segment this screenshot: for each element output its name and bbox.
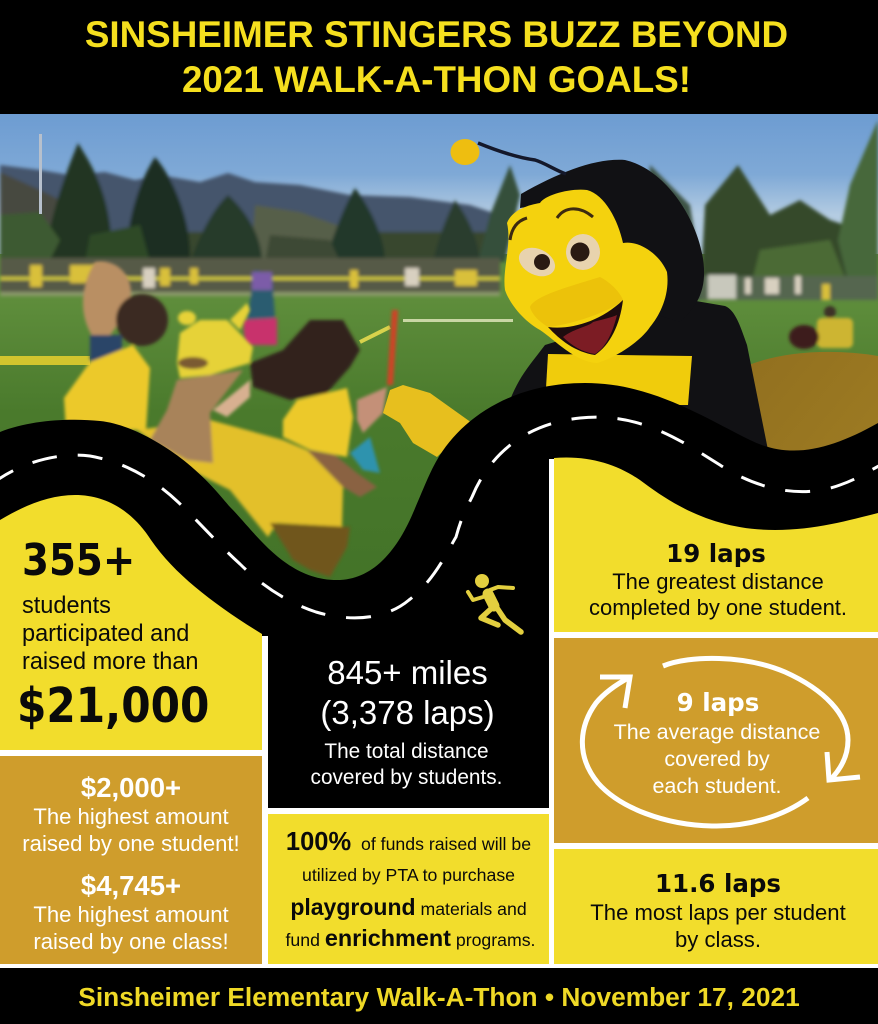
stat: 355+ students: [17, 535, 209, 734]
miles caption: covered by students.: [311, 766, 502, 789]
caption: The greatest distance: [612, 569, 824, 594]
mouth: [548, 300, 623, 355]
stat: 19 laps: [589, 539, 847, 620]
caption: [589, 569, 847, 620]
title banner: [0, 0, 878, 114]
panel: funds yellow: [268, 814, 549, 964]
child: girl with cap: [137, 420, 343, 537]
miles caption: The total distance: [324, 740, 489, 763]
title: SINSHEIMER STINGERS BUZZ BEYOND: [85, 14, 788, 55]
number 355+: 355+: [22, 535, 135, 586]
panel: money gold: [0, 756, 262, 964]
hood: [520, 160, 704, 322]
arm: [307, 450, 377, 497]
eyes: [514, 242, 560, 282]
stat: total miles: [311, 654, 502, 789]
highest by class: raised by one class!: [33, 929, 229, 954]
caption: completed by one student.: [589, 595, 847, 620]
photo: walk-a-thon field with mascot: [0, 114, 878, 594]
students text: participated and: [22, 620, 189, 647]
hand: [357, 387, 387, 433]
miles heading: [320, 654, 495, 731]
miles caption: [311, 740, 502, 789]
panel: average gold: [554, 638, 878, 843]
panel: most laps yellow: [554, 849, 878, 964]
highest by student: The highest amount: [33, 804, 229, 829]
line two: utilized by PTA to purchase: [302, 865, 515, 885]
child: long-haired runner: [83, 262, 131, 341]
icon: runner: [468, 574, 521, 632]
road centre dashes: [0, 417, 878, 618]
sleeve: [383, 385, 472, 457]
child: girl with dark hair: [283, 388, 353, 457]
caption: each student.: [652, 774, 782, 798]
blue cup: [350, 437, 380, 473]
wing: [746, 352, 878, 470]
caption: The average distance: [614, 720, 820, 744]
brows: [510, 218, 527, 240]
highest by student: [22, 772, 240, 856]
footer bar: [0, 968, 878, 1024]
line three: playground materials and: [290, 894, 527, 920]
caption: by class.: [675, 927, 761, 952]
stat: 9 laps: [614, 688, 820, 798]
highest by student: $2,000+: [81, 772, 181, 803]
miles heading: 845+ miles: [327, 654, 488, 691]
caption: [614, 720, 820, 798]
amount raised: $21,000: [17, 678, 209, 734]
students text: [22, 592, 198, 675]
title: [85, 14, 788, 100]
miles heading: (3,378 laps): [320, 694, 495, 731]
people at right: [789, 306, 853, 349]
highest by class: [33, 870, 229, 954]
title: 2021 WALK-A-THON GOALS!: [182, 59, 691, 100]
students text: raised more than: [22, 648, 198, 675]
tape lines: [0, 356, 90, 365]
stat: 11.6 laps: [590, 869, 846, 952]
footer: Sinsheimer Elementary Walk-A-Thon • November 17, 2021: [78, 982, 800, 1012]
highest by class: $4,745+: [81, 870, 181, 901]
body: [510, 300, 770, 460]
line four: fund enrichment programs.: [286, 925, 535, 951]
students text: students: [22, 592, 111, 619]
heading 19 laps: 19 laps: [666, 539, 766, 568]
mascot: [383, 139, 878, 470]
highest by class: The highest amount: [33, 902, 229, 927]
panel: students yellow: [0, 495, 262, 750]
caption: The most laps per student: [590, 900, 846, 925]
face: [504, 190, 668, 363]
text: funds usage: [286, 828, 535, 951]
lamp post: [39, 134, 42, 214]
heading 11.6 laps: 11.6 laps: [655, 869, 781, 898]
belly: [545, 354, 692, 405]
panel: right top yellow: [554, 457, 878, 632]
hills and trees: [0, 120, 878, 345]
highest by student: raised by one student!: [22, 831, 240, 856]
caption: covered by: [664, 747, 770, 771]
line one: 100% of funds raised will be: [286, 828, 531, 856]
stat: highest amounts: [22, 772, 240, 954]
heading 9 laps: 9 laps: [677, 688, 759, 717]
orange pole: [387, 310, 398, 385]
road: [0, 383, 878, 660]
icon: lap loop arrows: [582, 658, 860, 826]
child: boy with yellow shirt: [116, 294, 168, 346]
antenna: [478, 143, 566, 174]
children: [64, 262, 398, 577]
caption: [590, 900, 846, 952]
